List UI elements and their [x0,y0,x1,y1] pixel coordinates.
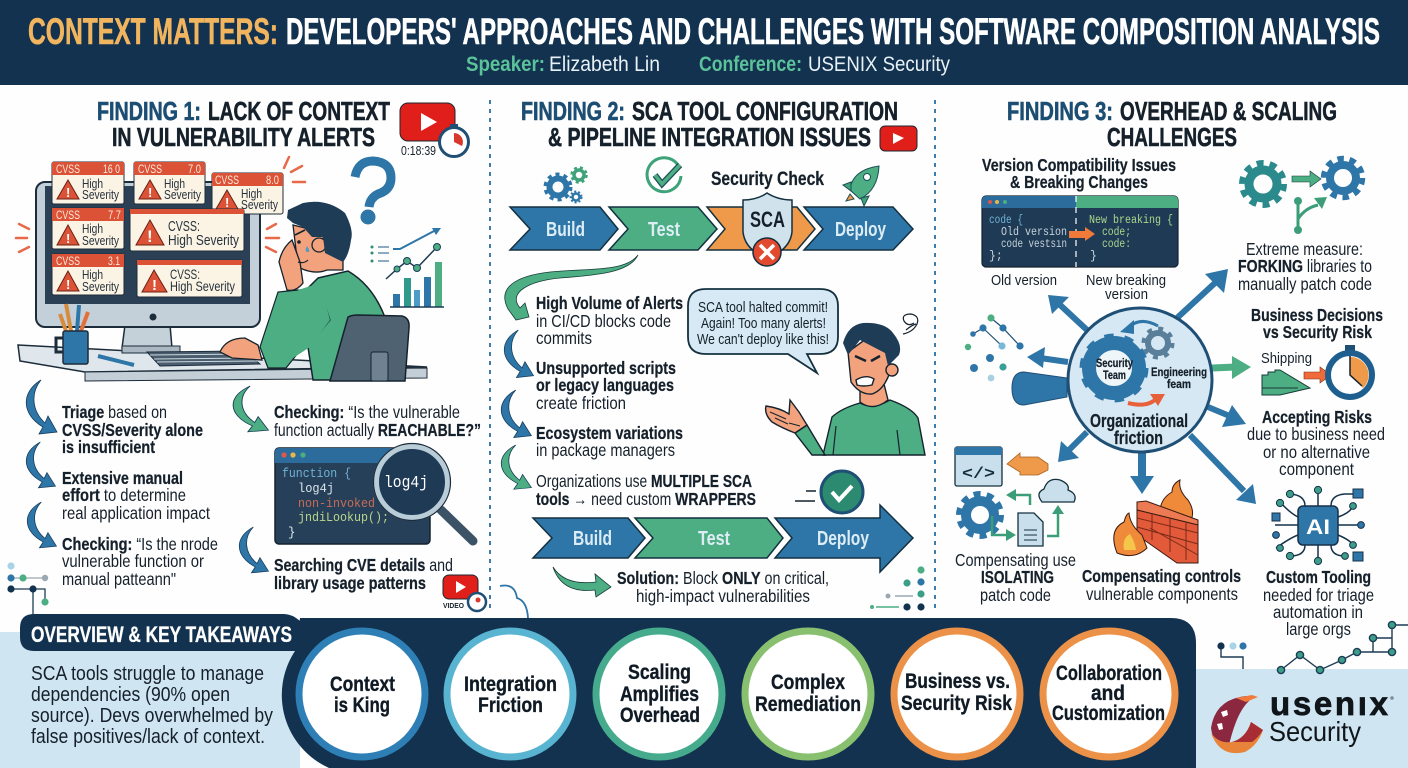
code diff window: New breaking { [1089,214,1173,227]
panel: usenix logo [1196,669,1408,768]
alert cards: CVSS [138,162,162,176]
icon: small video badge: VIDEO [443,603,465,610]
icon: orange arrow [1007,453,1048,475]
speech bubble [688,289,838,373]
step: deploy [775,505,913,572]
text block: reachability: Checking: “Is the vulnerable [274,402,460,422]
code window with magnifier: } [288,526,296,540]
alert cards: 3.1 [108,254,120,268]
code window with magnifier: log4j [298,482,334,496]
code diff window: code vestsın [1001,238,1067,251]
title: CONTEXT MATTERS: [28,11,278,52]
text block: searching CVE: Searching CVE details and [274,555,453,575]
takeaway: business risk: Security Risk [901,691,1012,715]
text block: accepting risks: or no alternative [1263,442,1370,462]
text block: forking [1238,239,1372,294]
text block: business decisions [1251,305,1383,342]
code diff window: Old version [1001,226,1067,239]
icon: gear, document and flows [959,489,1064,546]
icon: code window: </> [962,465,995,483]
text block: multiple tools [536,471,756,509]
alert cards: CVSS [215,173,239,187]
text block: searching CVE: library usage patterns [274,573,426,593]
code diff window: }; [989,250,1003,263]
labels: old and new version: Old version [991,272,1057,289]
engineering gear [1120,320,1172,406]
alert cards: 8.0 [266,173,279,187]
security team gear: Security [1096,358,1133,370]
speech bubble: We can't deploy like this! [697,332,829,348]
icon: cloud [1039,479,1075,502]
step: SCA check: SCA [750,207,785,232]
text block: manual effort: Extensive manual [62,468,183,488]
text block: compensating controls [1082,566,1241,604]
alert cards: Severity [82,233,119,248]
text block: custom tooling: Custom Tooling [1266,567,1371,587]
text block: compensating controls: Compensating controls [1082,566,1241,586]
security team gear: Team [1103,370,1126,382]
heading: finding 1: FINDING 1: [97,96,201,126]
takeaway: collaboration: Collaboration [1056,661,1162,685]
alert cards: High Severity [168,233,240,249]
takeaways band [282,618,1196,768]
label: shipping: Shipping [1261,350,1312,367]
desk [18,345,427,381]
alert cards: CVSS [56,254,80,268]
speech bubble: SCA tool halted commit! [698,300,828,316]
text block: accepting risks [1247,407,1385,479]
text block: solution: high-impact vulnerabilities [636,586,810,606]
keyboard [147,351,260,366]
logo wordmark: Security [1269,716,1361,747]
text block: accepting risks: component [1279,459,1354,479]
text block: high volume [536,293,683,348]
text block: reachability [274,402,481,440]
text block: solution: Solution: Block ONLY on critical, [617,568,829,588]
text block: custom tooling [1263,567,1374,639]
text block: unsupported scripts: Unsupported scripts [536,358,676,378]
code window with magnifier: log4j [384,474,428,493]
text block: triage: CVSS/Severity alone [62,420,203,440]
developer figure [220,202,400,380]
text block: triage [62,402,203,457]
code diff window [982,196,1178,267]
text block: isolating: patch code [980,585,1051,605]
step: build [510,207,618,250]
code window with magnifier: function { [282,467,351,481]
text block: solution [617,568,829,606]
takeaway: collaboration: and [1091,681,1125,705]
labels: old and new version: New breaking [1086,272,1166,289]
icon: video with stopwatch [400,103,468,158]
text block: high volume: High Volume of Alerts [536,293,683,313]
overview heading tab: OVERVIEW & KEY TAKEAWAYS [31,622,292,647]
step: deploy: Deploy [817,528,870,550]
security team gear [1083,337,1145,399]
alert cards: ! [152,277,157,294]
text block: unsupported scripts: or legacy languages [536,375,674,395]
question mark [355,161,391,224]
alert cards: High [164,176,185,191]
icon: AI chip: AI [1306,516,1330,539]
alert cards: 16 0 [103,162,120,176]
second pipeline [533,505,913,572]
radial arrows [1027,269,1256,504]
icon: shipping arrow and stopwatch [1262,345,1372,397]
overview text: SCA tools struggle to manage [31,663,264,685]
step: test [609,207,717,250]
arrows: left column [26,380,268,573]
step: deploy [804,207,913,250]
text block: custom tooling: large orgs [1286,619,1351,639]
overview text: dependencies (90% open [31,684,230,706]
engineering team label [1151,365,1207,391]
text block: checking pattern: manual patteann" [62,569,176,589]
alert cards: ! [66,277,70,292]
alert cards: 7.0 [188,162,201,176]
alert cards: CVSS [56,162,80,176]
takeaway: collaboration: Customization [1052,701,1165,725]
alert cards: High [241,186,262,201]
speaker and conference: Elizabeth Lin [549,53,660,76]
icon: pipe [1012,372,1067,405]
icon: video with stopwatch: 0:18:39 [401,144,436,158]
center label: friction [1114,427,1163,448]
alert cards: High [82,176,103,191]
text block: forking: manually patch code [1238,274,1372,294]
text block: checking pattern: vulnerable function or [62,551,204,571]
text block: manual effort [62,468,210,523]
speech bubble: Again! Too many alerts! [701,316,826,332]
takeaway: integration friction [447,631,573,757]
text block: custom tooling: needed for triage [1263,585,1374,605]
alert cards: CVSS [56,208,80,222]
overview heading tab [20,614,300,651]
alert cards: Severity [164,187,201,202]
text block: high volume: in CI/CD blocks code [536,311,671,331]
takeaway: integration friction: Friction [478,693,543,717]
icon: video [880,126,917,151]
step: build [533,518,645,558]
icon: firewall with flames [1114,480,1198,563]
pen cup and pen [56,304,134,365]
step: test: Test [648,219,680,241]
text block: multiple tools: tools → need custom WRAPPERS [536,489,756,509]
takeaway: scaling [596,631,722,757]
circuit decoration left [7,562,49,616]
text block: compensating controls: vulnerable components [1086,584,1238,604]
text block: unsupported scripts: create friction [536,393,626,413]
code window with magnifier: jndiLookup(); [298,511,389,525]
logo mark [1211,695,1263,753]
organizational friction circle [1068,308,1212,452]
alert cards: CVSS: [168,219,200,235]
takeaway: remediation [745,631,871,757]
arrow: to solution [553,567,611,597]
alert cards: Severity [241,197,278,212]
icon: forking gears [1242,158,1362,234]
takeaway: scaling: Amplifies [620,682,699,706]
alert cards: ! [147,227,153,246]
alarm rays [16,157,305,252]
step: test [635,518,783,558]
step: build: Build [546,219,585,241]
text block: triage: is insufficient [62,437,155,457]
labels: old and new version [991,272,1166,303]
subheading: version compatibility: & Breaking Changes [1010,172,1148,192]
takeaway: context is king: Context [330,672,395,696]
takeaway: scaling: Scaling [628,660,691,684]
code diff window: code { [989,214,1023,227]
network dots [965,314,1024,381]
code diff window: code: [1102,238,1131,251]
heading: finding 3: CHALLENGES [1107,122,1237,152]
step: deploy: Deploy [835,219,887,241]
heading: finding 2: SCA TOOL CONFIGURATION [632,96,898,126]
alert cards: 7.7 [108,208,121,222]
code diff window: } [1090,250,1097,263]
icon: code window [955,447,1002,486]
panel: overview and takeaways [0,614,1196,768]
text block: checking pattern [62,534,218,589]
takeaway: business risk [894,631,1020,757]
alert cards [52,162,283,297]
text block: manual effort: real application impact [62,503,210,523]
text block: ecosystem [536,423,683,460]
text block: manual effort: effort to determine [62,485,186,505]
code window with magnifier: non-invoked [298,497,375,511]
icon: small video badge [443,575,486,611]
speaker and conference: Speaker: [466,53,545,76]
engineering team label: Engineering [1151,365,1207,379]
logo wordmark: usenıx [1270,685,1389,722]
arrows: middle column [501,330,534,489]
engineering team label: feam [1167,377,1191,391]
heading: finding 2: & PIPELINE INTEGRATION ISSUES [548,122,871,152]
center label [1090,410,1188,448]
circuit decoration middle [500,566,925,618]
speaker and conference [466,53,950,76]
heading: finding 3 [1007,96,1337,152]
text block: multiple tools: Organizations use MULTIPLE SCA [536,471,752,491]
alert cards: High [82,267,103,282]
illustration: developer at desk with alerts [16,157,444,381]
icon: approved check [795,471,863,513]
text block: isolating [955,550,1076,605]
text block: business decisions: vs Security Risk [1263,322,1372,342]
labels: old and new version: version [1105,286,1148,303]
frustrated developer [766,314,925,455]
overview background [0,632,300,768]
takeaway: remediation: Complex [771,670,845,694]
subheading: version compatibility: Version Compatibility Issues [982,155,1176,175]
overview text [31,663,273,748]
takeaway: context is king [299,631,425,757]
step: SCA check [707,193,815,266]
alert cards: ! [225,195,229,210]
chart icon [370,228,444,307]
text block: ecosystem: Ecosystem variations [536,423,683,443]
overview text: false positives/lack of context. [31,726,265,748]
overview text: source). Devs overwhelmed by [31,705,273,727]
heading: finding 3: FINDING 3: [1007,96,1113,126]
computer monitor [36,182,260,353]
text block: checking pattern: Checking: “Is the nrode [62,534,218,554]
alert cards: ! [66,185,70,200]
panel: finding 2 [500,96,925,618]
heading: finding 2 [521,96,898,152]
text block: isolating: ISOLATING [981,567,1054,587]
takeaway: business risk: Business vs. [905,669,1010,693]
text block: forking: FORKING libraries to [1238,256,1372,276]
header banner [0,0,1408,85]
circuit decoration right [1217,621,1408,674]
panel: finding 1 [7,96,486,616]
step: test: Test [698,528,730,550]
alert cards: Severity [82,279,119,294]
text block: unsupported scripts [536,358,676,413]
icon: gears [546,168,586,202]
alert cards: Severity [82,187,119,202]
heading: finding 1 [97,96,390,152]
heading: finding 2: FINDING 2: [521,96,625,126]
alert cards: High Severity [170,278,235,294]
speaker and conference: Conference: [699,53,802,76]
alert cards: CVSS: [170,266,200,282]
subheading: version compatibility [982,155,1176,192]
center label: Organizational [1090,410,1188,431]
text block: searching CVE [274,555,453,593]
takeaway: scaling: Overhead [620,703,700,727]
pipeline: build test SCA deploy [510,193,913,266]
step: build: Build [573,528,612,550]
icon: rocket [843,166,879,206]
text block: triage: Triage based on [62,402,167,422]
alert cards: High [82,221,103,236]
takeaway: remediation: Remediation [755,692,861,716]
takeaway: collaboration [1043,631,1175,757]
icon: AI chip [1272,486,1364,565]
text block: accepting risks: Accepting Risks [1262,407,1372,427]
arrow: swoop from pipeline [505,255,638,320]
heading: finding 1: IN VULNERABILITY ALERTS [112,122,375,152]
heading: finding 1: LACK OF CONTEXT [208,96,390,126]
alert cards: ! [148,185,152,200]
takeaway: integration friction: Integration [464,672,557,696]
code diff window: code; [1102,226,1131,239]
text block: isolating: Compensating use [955,550,1076,570]
icon: check circle [647,158,681,192]
code window with magnifier [275,444,473,544]
text block: ecosystem: in package managers [536,440,675,460]
alert cards: ! [66,231,70,246]
panel: finding 3 [955,96,1385,639]
text block: custom tooling: automation in [1273,602,1363,622]
text block: high volume: commits [536,328,592,348]
speaker and conference: USENIX Security [808,53,950,76]
text block: reachability: function actually REACHABLE?” [274,420,481,440]
text block: forking: Extreme measure: [1246,239,1363,259]
office chair [330,315,409,381]
logo wordmark [1269,685,1394,747]
label: security check: Security Check [711,169,824,190]
takeaway: context is king: is King [334,693,390,717]
